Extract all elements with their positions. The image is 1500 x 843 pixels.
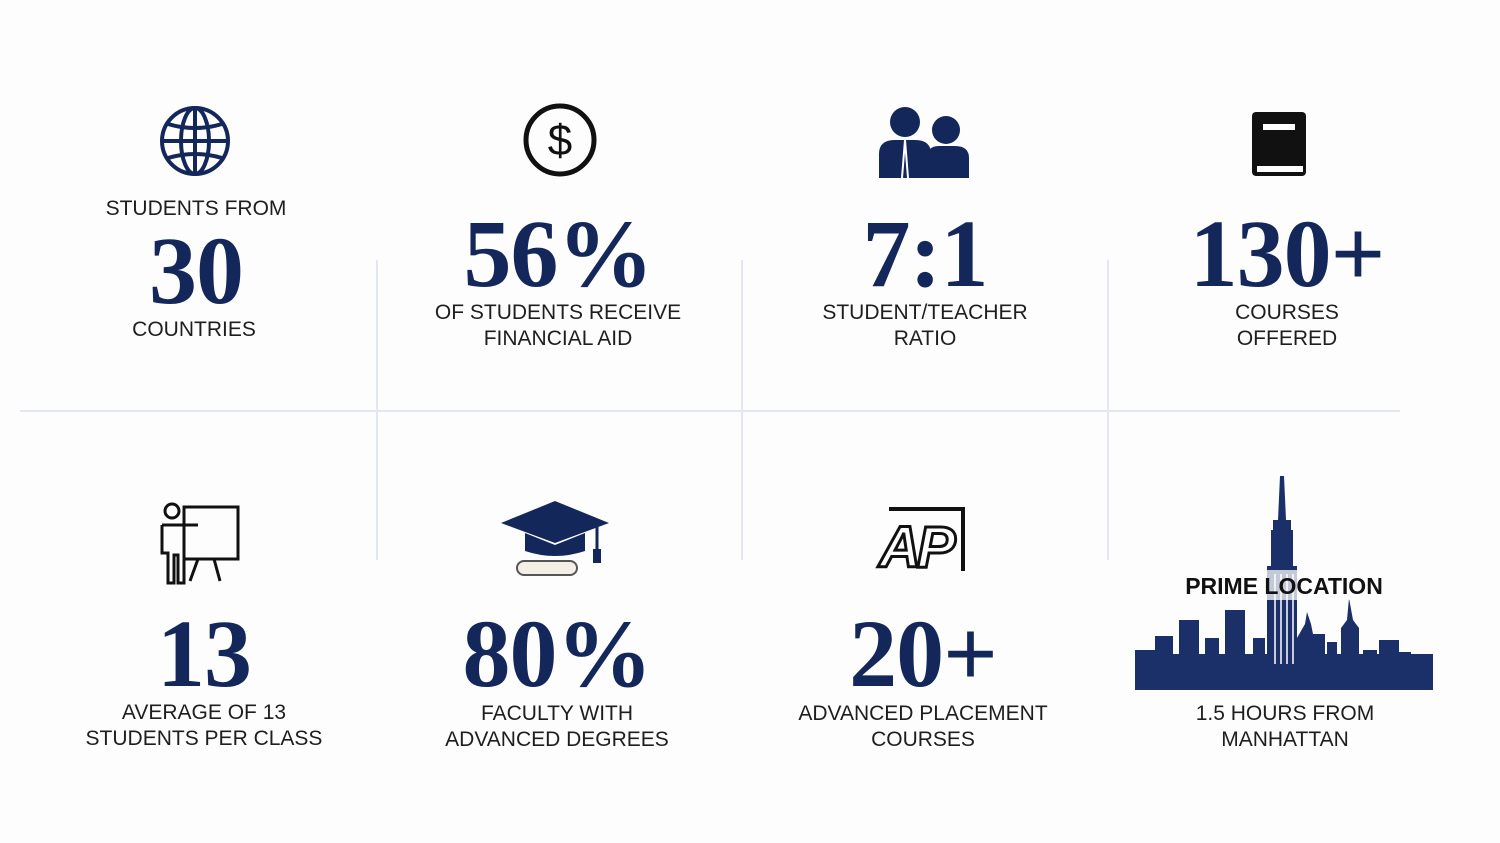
text: courses label (1235, 301, 1339, 350)
icon: dollar (524, 104, 596, 176)
text: location label (1196, 702, 1374, 751)
text: financial aid label: FINANCIAL AID (484, 327, 632, 350)
number: 30: 30 (149, 217, 243, 324)
icon: globe (160, 106, 230, 176)
text: courses label: OFFERED (1237, 327, 1337, 350)
number: 20+: 20+ (849, 600, 997, 707)
text: AP label: COURSES (871, 728, 975, 751)
text: faculty label: FACULTY WITH (481, 702, 633, 725)
text: courses label: COURSES (1235, 301, 1339, 324)
panel: class size (86, 502, 322, 750)
icon: graduation cap (501, 501, 609, 576)
number: 7:1: 7:1 (863, 200, 987, 307)
icon: teacher at board (160, 502, 240, 584)
text: financial aid label (435, 301, 681, 350)
panel: countries (106, 106, 286, 341)
text: faculty label: ADVANCED DEGREES (445, 728, 669, 751)
text: ratio label: STUDENT/TEACHER (822, 301, 1028, 324)
text: class size label: AVERAGE OF 13 (122, 701, 286, 724)
panel: courses (1190, 112, 1384, 350)
text: financial aid label: OF STUDENTS RECEIVE (435, 301, 681, 324)
text: ratio label (822, 301, 1028, 350)
icon: skyline: PRIME LOCATION (1185, 573, 1383, 599)
number: 56%: 56% (464, 200, 652, 307)
panel: AP courses (798, 507, 1048, 751)
number: 80%: 80% (462, 600, 652, 707)
text: countries: COUNTRIES (132, 318, 256, 341)
panel: location (1135, 476, 1433, 751)
text: AP label: ADVANCED PLACEMENT (798, 702, 1048, 725)
number: 13: 13 (157, 600, 251, 707)
icon: people (879, 107, 969, 178)
number: 130+: 130+ (1190, 200, 1384, 307)
panel: faculty (445, 501, 669, 751)
panel: financial aid (435, 104, 681, 350)
text: location label: 1.5 HOURS FROM (1196, 702, 1374, 725)
text: ratio label: RATIO (894, 327, 956, 350)
icon: dollar: $ (548, 116, 572, 165)
text: AP label (798, 702, 1048, 751)
text: class size label: STUDENTS PER CLASS (86, 727, 322, 750)
icon: book (1252, 112, 1306, 176)
text: location label: MANHATTAN (1221, 728, 1349, 751)
text: faculty label (445, 702, 669, 751)
panel: ratio (822, 107, 1028, 350)
text: class size label (86, 701, 322, 750)
icon: skyline (1135, 476, 1433, 690)
text: students from: STUDENTS FROM (106, 197, 286, 220)
